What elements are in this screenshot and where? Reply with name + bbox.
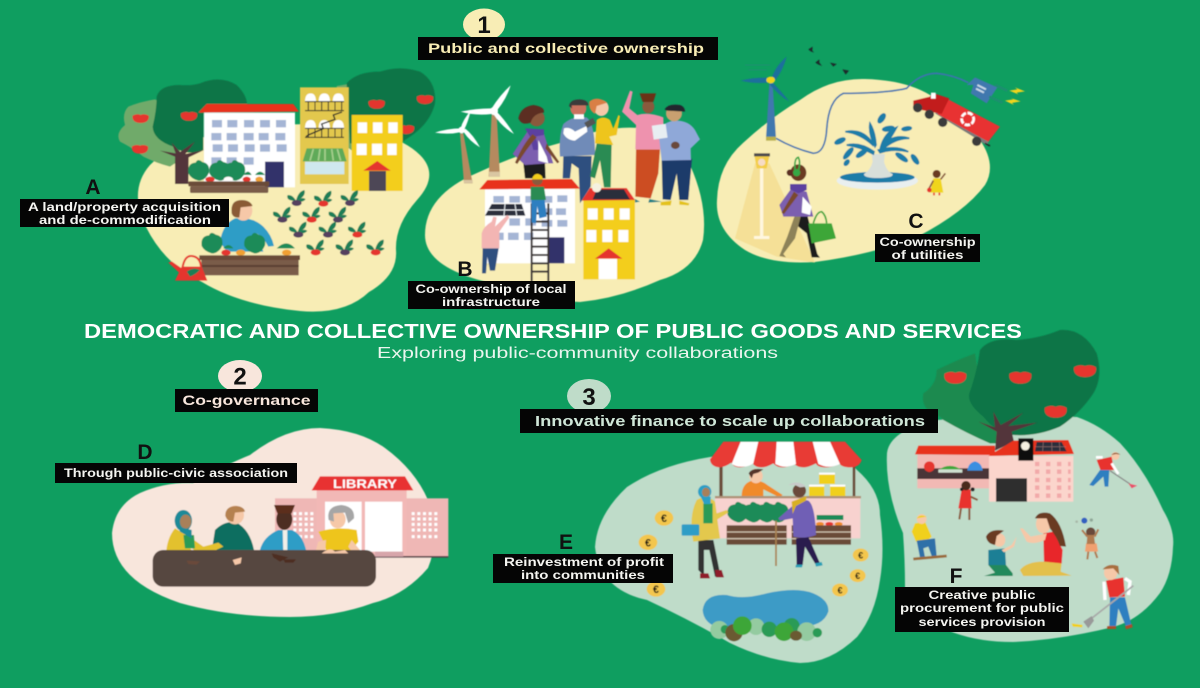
icon: community building	[915, 438, 1074, 502]
icon: man in blue shirt	[260, 505, 307, 561]
icon: man with tablet	[560, 99, 596, 203]
icon: large wind turbine	[461, 85, 514, 177]
icon: person in green hoodie	[213, 506, 254, 558]
label F: Creative public	[928, 588, 1036, 602]
icon: meeting table	[153, 550, 376, 587]
icon: yellow building	[352, 115, 403, 191]
label C: of utilities	[892, 248, 964, 262]
icon: ochre building with balconies and shop	[300, 87, 349, 184]
label B: infrastructure	[442, 295, 540, 309]
panel: blob A land acquisition	[138, 124, 429, 312]
icon: small wind turbine	[435, 111, 480, 183]
label A: and de-commodification	[39, 213, 211, 227]
heading: section 1	[418, 8, 718, 60]
icon: person in pink raising arm	[622, 91, 664, 203]
heading: section 2: Co-governance	[182, 392, 311, 408]
icon: person in light blue with papers	[652, 105, 700, 205]
icon: sweeper bottom right	[1072, 565, 1133, 629]
icon: woman with purple scarf	[513, 105, 559, 178]
illustration: public services scene	[912, 330, 1137, 629]
label F	[895, 565, 1069, 632]
icon: large apple tree	[923, 330, 1099, 451]
icon: woman with teal headscarf	[166, 510, 223, 563]
label C: C	[908, 210, 924, 233]
icon: woman with headphones and green bag	[779, 157, 836, 258]
icon: child playing with ball	[1075, 518, 1098, 559]
illustration: utilities scene	[735, 47, 1025, 263]
icon: sweeper top right	[1089, 452, 1137, 488]
label D	[55, 441, 297, 483]
panel: blob F public procurement	[887, 416, 1173, 642]
subtitle: Exploring public-community collaborations	[377, 345, 778, 362]
label B	[408, 258, 575, 309]
icon: woman in yellow top	[589, 99, 620, 187]
icon: water fountain	[834, 113, 920, 190]
icon: yellow building with solar roof	[582, 183, 635, 279]
icon: plug with lightning bolts	[967, 77, 1025, 105]
icon: red watering can	[168, 256, 207, 281]
icon: upper planter	[188, 160, 269, 193]
label D: Through public-civic association	[64, 466, 288, 480]
main title: DEMOCRATIC AND COLLECTIVE OWNERSHIP OF PUBLIC GOODS AND SERVICES	[84, 321, 1022, 343]
icon: red recycling truck	[913, 93, 1000, 146]
label C: Co-ownership	[880, 235, 976, 249]
label B: Co-ownership of local	[416, 282, 566, 296]
icon: planters of vegetables	[727, 502, 851, 545]
label B: B	[457, 258, 473, 281]
icon: pond with bushes	[703, 590, 828, 641]
label A: A land/property acquisition	[28, 200, 221, 214]
icon: white building with solar installers	[479, 174, 580, 282]
label E	[493, 531, 673, 583]
panel: blob E reinvestment	[595, 451, 882, 663]
icon: white apartment building	[198, 104, 299, 187]
icon: hands on table	[187, 550, 348, 565]
heading: section 1: 1	[477, 12, 491, 39]
panel: blob D public-civic association	[112, 428, 434, 617]
icon: euro coins	[639, 510, 869, 597]
icon: right apple tree	[337, 68, 435, 152]
icon: rows of radishes	[273, 190, 385, 255]
icon: flock of birds	[808, 47, 849, 75]
icon: shopper in yellow coat	[682, 485, 728, 578]
heading: section 3: Innovative finance to scale up collaborations	[535, 414, 925, 430]
icon: gardener with raised bed	[199, 200, 300, 275]
label E: E	[559, 531, 573, 554]
icon: elderly woman with cane	[776, 483, 823, 567]
illustration: market and pond	[639, 442, 869, 641]
label D: D	[137, 441, 153, 464]
heading: section 2: 2	[233, 364, 247, 390]
illustration: local infrastructure and community	[435, 85, 700, 282]
label C	[875, 210, 980, 262]
label E: into communities	[521, 568, 645, 582]
icon: left apple tree	[118, 80, 247, 184]
panel: blob B local infrastructure	[425, 128, 704, 302]
icon: street lamp with light cone	[735, 153, 815, 263]
icon: little girl in yellow	[927, 170, 945, 195]
icon: girl in red dress	[958, 481, 978, 520]
illustration: co-governance meeting at library	[153, 476, 448, 587]
label A	[20, 176, 229, 227]
icon: library building	[275, 476, 448, 558]
heading: section 3: 3	[582, 384, 596, 411]
illustration layer	[112, 47, 1173, 663]
icon: market stall	[710, 442, 862, 538]
illustration: land and garden scene	[118, 68, 435, 281]
icon: woman clapping hands with child	[984, 513, 1072, 576]
label E: Reinvestment of profit	[504, 555, 664, 569]
label F: services provision	[918, 615, 1046, 629]
heading: section 3	[520, 379, 938, 433]
label F: procurement for public	[900, 601, 1064, 615]
label A: A	[85, 176, 101, 199]
panel: blob C utilities	[717, 79, 990, 263]
heading: section 1: Public and collective ownership	[428, 40, 704, 56]
icon: woman in grey hair and yellow	[315, 505, 363, 554]
icon: blue wind turbine with cable	[741, 57, 968, 153]
heading: section 2	[175, 360, 318, 412]
icon: kid on skateboard	[912, 514, 947, 559]
icon: library building: LIBRARY	[333, 477, 397, 491]
label F: F	[950, 565, 963, 588]
